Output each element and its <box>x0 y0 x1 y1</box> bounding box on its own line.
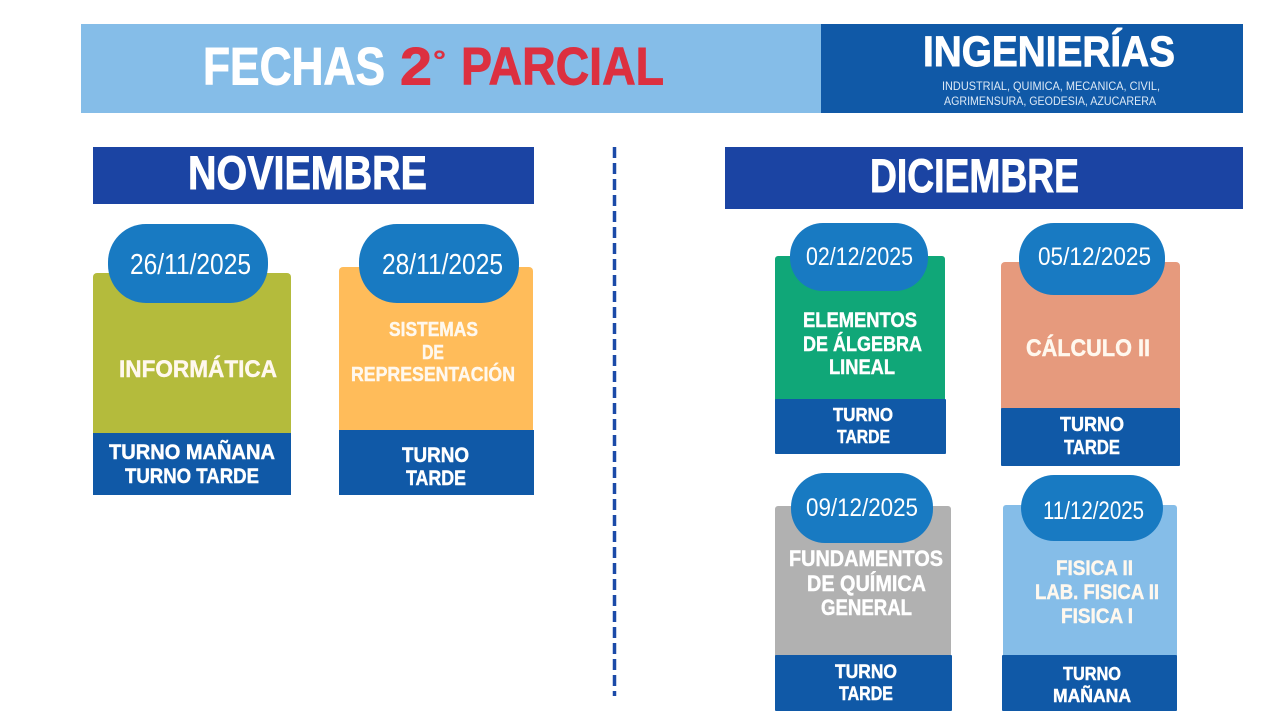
panel: ingenierías <box>821 24 1243 113</box>
subject: LAB. FISICA II <box>1035 581 1159 604</box>
shift: TURNO <box>1063 664 1121 684</box>
date pill: 11/12/2025 <box>1021 475 1163 541</box>
subject: FUNDAMENTOS <box>789 546 943 571</box>
shift: TARDE <box>837 427 890 447</box>
date pill: 05/12/2025 <box>1019 223 1165 295</box>
subject: FISICA I <box>1061 605 1133 628</box>
shift <box>402 444 469 490</box>
subject <box>1035 557 1159 628</box>
shift: TURNO <box>833 405 893 425</box>
card: física <box>1002 475 1177 711</box>
date pill: 05/12/2025: 05/12/2025 <box>1038 243 1151 271</box>
shift: TARDE <box>839 684 893 705</box>
subject: GENERAL <box>821 595 912 620</box>
subject: ELEMENTOS <box>803 309 917 332</box>
date pill: 02/12/2025 <box>790 223 928 291</box>
date pill: 26/11/2025: 26/11/2025 <box>130 249 251 281</box>
shift: TURNO <box>1060 414 1124 436</box>
card: sistemas de representación <box>339 224 534 495</box>
subject: CÁLCULO II <box>1026 334 1150 362</box>
date pill: 26/11/2025 <box>108 224 268 303</box>
date pill: 28/11/2025 <box>359 224 519 303</box>
shift: TARDE <box>1064 437 1120 459</box>
shift <box>833 405 893 447</box>
subject <box>803 309 922 379</box>
shift: MAÑANA <box>1053 685 1131 706</box>
card: elementos de álgebra lineal <box>775 223 946 454</box>
card: cálculo II <box>1001 223 1180 466</box>
subject <box>789 546 943 620</box>
subject: INFORMÁTICA <box>119 355 277 383</box>
subject: DE QUÍMICA <box>807 571 926 596</box>
date pill: 02/12/2025: 02/12/2025 <box>806 243 913 271</box>
date pill: 11/12/2025: 11/12/2025 <box>1043 497 1144 525</box>
panel: ingenierías: INGENIERÍAS <box>923 28 1175 76</box>
shift <box>109 441 275 488</box>
heading: diciembre: DICIEMBRE <box>870 149 1079 202</box>
subject: REPRESENTACIÓN <box>351 362 515 386</box>
date pill: 09/12/2025 <box>791 473 933 543</box>
title <box>203 38 664 96</box>
subject: FISICA II <box>1056 557 1133 580</box>
date pill: 09/12/2025: 09/12/2025 <box>806 494 918 522</box>
shift <box>835 662 897 705</box>
shift: TARDE <box>406 467 466 490</box>
shift: TURNO <box>402 444 469 467</box>
shift <box>1053 664 1131 706</box>
heading: noviembre <box>93 146 534 204</box>
card: fundamentos de química general <box>775 473 952 711</box>
subject: LINEAL <box>829 356 895 379</box>
card: informática <box>93 224 291 495</box>
subject <box>351 319 515 386</box>
panel: ingenierías: AGRIMENSURA, GEODESIA, AZUCARERA <box>944 94 1156 108</box>
subject: DE <box>422 342 444 364</box>
shift: TURNO <box>835 662 897 683</box>
date pill: 28/11/2025: 28/11/2025 <box>382 249 503 281</box>
panel: ingenierías: INDUSTRIAL, QUIMICA, MECANICA, CIVIL, <box>942 79 1160 93</box>
subject: SISTEMAS <box>389 319 478 341</box>
title: 2 <box>400 38 432 96</box>
shift <box>1060 414 1124 459</box>
heading: diciembre <box>725 147 1243 209</box>
shift: TURNO TARDE <box>125 465 259 488</box>
title: ° <box>433 45 446 76</box>
subject: DE ÁLGEBRA <box>803 333 922 356</box>
heading: noviembre: NOVIEMBRE <box>188 146 427 199</box>
title: FECHAS <box>203 38 385 96</box>
shift: TURNO MAÑANA <box>109 441 275 464</box>
header banner <box>81 24 1243 113</box>
title: PARCIAL <box>461 38 664 96</box>
